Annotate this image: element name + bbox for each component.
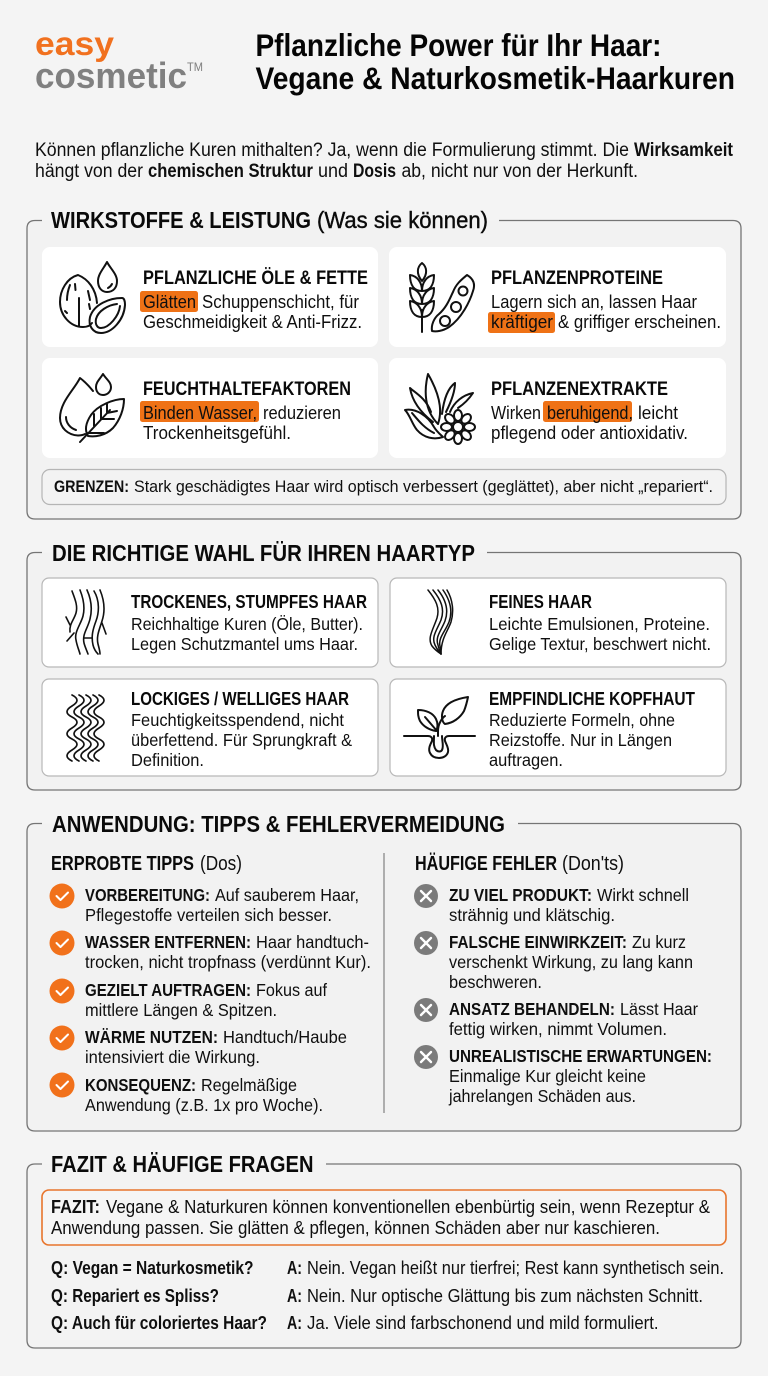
icon: aloe plant and flower [405,374,475,444]
mistake: Falsche Einwirkzeit [414,931,693,992]
tip: Gezielt auftragen [50,978,327,1020]
FAQ 2: Q: Repariert es Spliss? [51,1285,219,1306]
icon: fine hair [428,590,453,654]
card text: Feuchthaltefaktoren: Binden Wasser, [143,403,257,423]
card text: feines Haar [489,591,711,654]
mistake: Zu viel Produkt: Wirkt schnell [597,885,689,905]
intro text: Dosis [353,161,396,182]
intro text: ab, nicht nur von der Herkunft. [402,161,638,182]
tip: Konsequenz [50,1072,323,1115]
title: Pflanzliche Power für Ihr Haar: [256,27,662,63]
mistake: Unrealistische Erwartungen [414,1045,712,1106]
card text: Öle und Fette: PFLANZLICHE ÖLE & FETTE [143,268,368,289]
card text: Proteine [488,268,721,333]
card text: feines Haar: FEINES HAAR [489,591,592,612]
mistake: Zu viel Produkt: strähnig und klätschig. [449,905,615,925]
card text: lockiges Haar: überfettend. Für Sprungkraft & [131,730,352,750]
callout: Grenzen [42,470,726,504]
tip: Konsequenz: Anwendung (z.B. 1x pro Woche). [85,1095,323,1115]
FAQ 2 [51,1285,703,1306]
card text: Öle und Fette: Schuppenschicht, für [202,292,359,312]
card: feines Haar [390,578,726,667]
heading: Anwendung: ANWENDUNG: TIPPS & FEHLERVERMEIDUNG [52,811,505,837]
card: Feuchthaltefaktoren [42,358,378,458]
tip: Vorbereitung: Pflegestoffe verteilen sich besser. [85,905,332,925]
intro text: Können pflanzliche Kuren mithalten? Ja, wenn die Formulierung stimmt. Die [35,140,629,161]
callout: Grenzen: GRENZEN: [54,477,129,496]
mistake: Zu viel Produkt [414,884,689,925]
card text: feines Haar: Gelige Textur, beschwert nicht. [489,634,711,654]
card text: trockenes Haar [131,591,367,654]
callout: Fazit [42,1190,726,1245]
card: lockiges Haar [42,679,378,776]
mistake: Ansatz behandeln: ANSATZ BEHANDELN: [449,999,615,1019]
logo: easy cosmetic: cosmetic [35,55,187,96]
callout: Fazit: FAZIT: [51,1196,100,1217]
card text: Extrakte: leicht [638,403,678,423]
card text: Feuchthaltefaktoren: reduzieren [263,403,341,423]
tip: Vorbereitung: Auf sauberem Haar, [215,885,359,905]
mistake: Zu viel Produkt: ZU VIEL PRODUKT: [449,885,592,905]
mistake: Unrealistische Erwartungen: jahrelangen Schäden aus. [448,1086,636,1106]
tip: Vorbereitung: VORBEREITUNG: [85,885,210,905]
mistake: Ansatz behandeln: fettig wirken, nimmt Volumen. [449,1019,667,1039]
card: Pflanzliche Öle und Fette [42,247,378,347]
tip: Vorbereitung [50,884,359,925]
icon: almonds and oil drop [60,262,125,333]
tip: Wasser entfernen: trocken, nicht tropfnass (verdünnt Kur). [85,952,371,972]
heading: Wirkstoffe und Leistung [51,207,488,233]
card text: Feuchthaltefaktoren: FEUCHTHALTEFAKTOREN [143,379,351,400]
column heading: Don'ts: HÄUFIGE FEHLER [415,852,557,875]
tip: Wasser entfernen: Haar handtuch- [256,932,369,952]
mistake: Falsche Einwirkzeit: beschweren. [449,972,542,992]
card text: Extrakte: PFLANZENEXTRAKTE [491,379,668,400]
mistake: Ansatz behandeln: Lässt Haar [620,999,698,1019]
FAQ 3: Ja. Viele sind farbschonend und mild formuliert. [307,1312,658,1333]
tip: Wärme nutzen: WÄRME NUTZEN: [85,1027,218,1047]
card text: Öle und Fette: Glätten [143,292,196,312]
card text: Proteine: & griffiger erscheinen. [558,312,721,332]
tip: Konsequenz: Regelmäßige [201,1075,297,1095]
card text: feines Haar: Leichte Emulsionen, Proteine. [489,614,710,634]
card text: lockiges Haar: Feuchtigkeitsspendend, nicht [131,710,344,730]
column: Erprobte Tipps [50,853,371,1115]
card text: trockenes Haar: TROCKENES, STUMPFES HAAR [131,591,367,612]
callout: Fazit: Vegane & Naturkuren können konventionellen ebenbürtig sein, wenn Rezeptur & [106,1196,711,1217]
logo: easy cosmetic: easy [35,25,115,62]
card text: Proteine: PFLANZENPROTEINE [491,268,663,289]
callout: Fazit: Anwendung passen. Sie glätten & pflegen, können Schäden aber nur kaschieren. [51,1217,660,1238]
intro text: hängt von der [35,161,144,182]
panel: Anwendung [27,811,741,1131]
icon: scalp with sprout [404,697,475,758]
intro text: chemischen Struktur [148,161,314,182]
title [256,27,735,96]
FAQ 1: A: [287,1257,302,1278]
card text: Extrakte: pflegend oder antioxidativ. [491,423,688,443]
tip: Gezielt auftragen: mittlere Längen & Spitzen. [85,1000,277,1020]
column heading: Dos: ERPROBTE TIPPS [51,853,194,875]
panel: Haartyp [27,540,741,790]
column heading: Don'ts: (Don'ts) [562,853,624,875]
card: empfindliche Kopfhaut [390,679,726,776]
mistake: Unrealistische Erwartungen: UNREALISTISCHE ERWARTUNGEN: [449,1046,712,1066]
FAQ 1: Nein. Vegan heißt nur tierfrei; Rest kann synthetisch sein. [307,1257,724,1278]
mistake: Falsche Einwirkzeit: verschenkt Wirkung, zu lang kann [449,952,693,972]
tip: Wärme nutzen: intensiviert die Wirkung. [85,1047,260,1067]
card text: Extrakte: beruhigend, [547,403,633,423]
FAQ 3 [51,1312,658,1333]
heading: Fazit: FAZIT & HÄUFIGE FRAGEN [51,1151,314,1177]
tip: Wärme nutzen [50,1026,347,1067]
card text: Proteine: kräftiger [491,312,553,332]
mistake: Ansatz behandeln [414,998,698,1039]
FAQ 1 [51,1257,724,1278]
logo: easy cosmetic: TM [187,60,203,74]
panel: Wirkstoffe und Leistung [27,207,741,519]
card text: Kopfhaut: EMPFINDLICHE KOPFHAUT [489,688,696,709]
card text: Kopfhaut: auftragen. [489,750,563,770]
card text: lockiges Haar [131,688,352,770]
card text: Kopfhaut [489,688,696,770]
card text: trockenes Haar: Legen Schutzmantel ums Haar. [131,634,358,654]
icon: curly hair [67,695,104,761]
mistake: Falsche Einwirkzeit: FALSCHE EINWIRKZEIT: [449,932,627,952]
FAQ 2: A: [287,1285,302,1306]
card text: Kopfhaut: Reizstoffe. Nur in Längen [489,730,672,750]
card text: Öle und Fette [140,268,368,332]
card text: lockiges Haar: LOCKIGES / WELLIGES HAAR [131,688,349,709]
card text: Kopfhaut: Reduzierte Formeln, ohne [489,710,675,730]
FAQ 3: A: [287,1312,302,1333]
panel: Fazit und häufige Fragen [27,1151,741,1348]
tip: Wasser entfernen: WASSER ENTFERNEN: [85,932,251,952]
tip: Gezielt auftragen: Fokus auf [256,980,327,1000]
card text: Feuchthaltefaktoren: Trockenheitsgefühl. [143,423,291,443]
FAQ 3: Q: Auch für coloriertes Haar? [51,1312,267,1333]
card: Pflanzenproteine [389,247,726,347]
card text: Feuchthaltefaktoren [140,379,351,443]
card: trockenes Haar [42,578,378,667]
icon: water drop with leaf [60,374,124,442]
heading: Wirkstoffe und Leistung: (Was sie können) [317,207,488,233]
card text: Extrakte [491,379,688,443]
tip: Wärme nutzen: Handtuch/Haube [223,1027,347,1047]
column heading: Dos: (Dos) [200,853,242,875]
mistake: Unrealistische Erwartungen: Einmalige Kur gleicht keine [449,1066,646,1086]
heading: Wirkstoffe und Leistung: WIRKSTOFFE & LEISTUNG [51,207,311,233]
logo: easy cosmetic [35,25,203,96]
column: Häufige Fehler [414,852,712,1106]
card text: trockenes Haar: Reichhaltige Kuren (Öle, Butter). [131,614,363,634]
card text: Öle und Fette: Geschmeidigkeit & Anti-Frizz. [143,312,362,332]
card text: Proteine: Lagern sich an, lassen Haar [491,292,697,312]
intro text: Wirksamkeit [634,140,734,161]
FAQ 1: Q: Vegan = Naturkosmetik? [51,1257,254,1278]
card text: Extrakte: Wirken [491,403,541,423]
card text: lockiges Haar: Definition. [131,750,204,770]
FAQ 2: Nein. Nur optische Glättung bis zum nächsten Schnitt. [307,1285,703,1306]
callout: Grenzen: Stark geschädigtes Haar wird optisch verbessert (geglättet), aber nicht „repariert“. [134,477,713,496]
heading: Die richtige Wahl: DIE RICHTIGE WAHL FÜR IHREN HAARTYP [52,540,475,566]
mistake: Falsche Einwirkzeit: Zu kurz [632,932,686,952]
icon: dry hair [66,590,106,654]
tip: Wasser entfernen [50,930,371,972]
tip: Konsequenz: KONSEQUENZ: [85,1075,196,1095]
card: Pflanzenextrakte [389,358,726,458]
intro text [35,140,734,182]
tip: Gezielt auftragen: GEZIELT AUFTRAGEN: [85,980,251,1000]
intro text: und [318,161,348,182]
icon: wheat and soybean pod [410,263,474,332]
